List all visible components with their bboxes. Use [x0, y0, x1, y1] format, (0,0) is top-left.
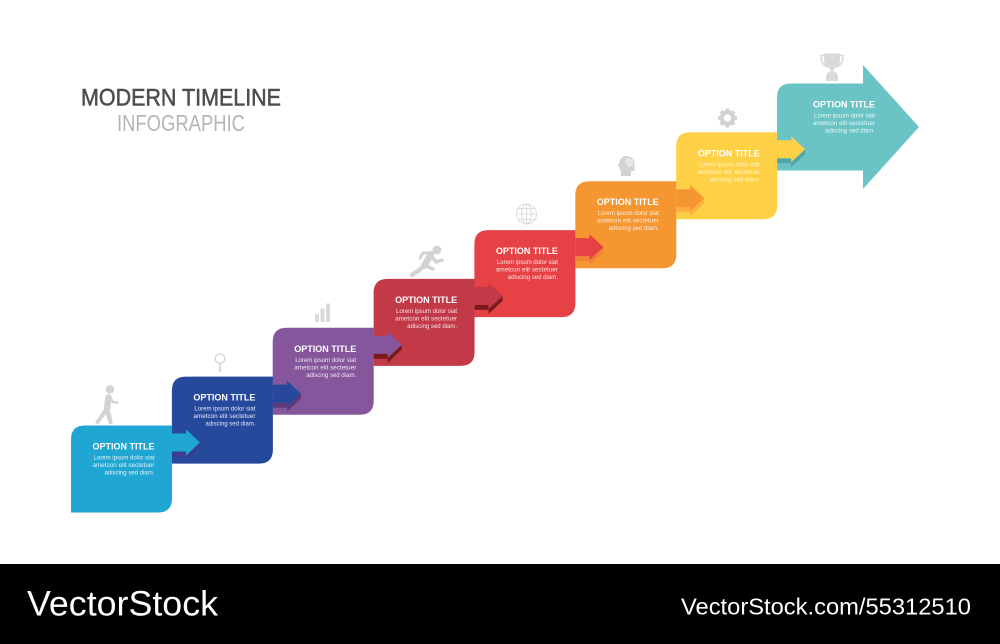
- step 3 panel: purple: ametcon elit sectetuer: [294, 364, 356, 371]
- step 4 panel: crimson: adiscing sed diam.: [407, 323, 457, 330]
- icon: running person: [412, 246, 442, 275]
- step 2 panel: navy: ametcon elit sectetuer: [193, 413, 255, 420]
- icon: walking person: [98, 385, 117, 422]
- icon: globe: [516, 204, 536, 224]
- step 5 panel: red: adiscing sed diam.: [508, 274, 558, 281]
- step 7 panel: yellow: [676, 132, 805, 219]
- footer bar: [0, 564, 1000, 644]
- step 3 panel: purple: adiscing sed diam.: [306, 372, 356, 379]
- step 2 panel: navy: OPTION TITLE: [193, 393, 255, 403]
- step 7 panel: yellow: Lorem ipsum dolor siat: [699, 161, 760, 168]
- step 1 panel: blue: [71, 426, 200, 512]
- step 6 panel: orange: [575, 181, 704, 268]
- footer brand text: VectorStock: [27, 585, 219, 624]
- step 1 panel: blue: Lorem ipsum dolor siat: [94, 454, 155, 462]
- icon: head with gears: [618, 156, 634, 176]
- step 1 panel: blue: OPTION TITLE: [92, 442, 154, 452]
- step 5 panel: red: OPTION TITLE: [496, 246, 558, 256]
- heading: modern timeline infographic: [81, 84, 281, 136]
- step 4 panel: crimson: Lorem ipsum dolor siat: [396, 308, 457, 315]
- step 4 panel: crimson: [374, 279, 503, 366]
- step 5 panel: red: [474, 230, 603, 317]
- step 2 panel: navy: Lorem ipsum dolor siat: [194, 406, 256, 413]
- step 3 panel: purple: [273, 328, 402, 415]
- step 6 panel: orange: adiscing sed diam.: [609, 225, 659, 232]
- step 8 panel: teal final arrow: adiscing sed diam.: [825, 128, 875, 134]
- icon: trophy: [821, 54, 843, 81]
- step 8 panel: teal final arrow: [777, 65, 919, 189]
- step 1 panel: blue: ametcon elit sectetuer: [92, 462, 154, 469]
- step 6 panel: orange: Lorem ipsum dolor siat: [598, 210, 659, 217]
- icon: magnifier: [215, 354, 225, 372]
- step 5 panel: red: ametcon elit sectetuer: [496, 267, 558, 274]
- step 8 panel: teal final arrow: ametcon elit sectetuer: [813, 120, 875, 127]
- step 3 panel: purple: Lorem ipsum dolor siat: [295, 357, 356, 364]
- icon: bar chart: [315, 304, 330, 322]
- step 2 panel: navy: [172, 377, 301, 464]
- icon: gear: [718, 108, 737, 128]
- step 4 panel: crimson: OPTION TITLE: [395, 295, 457, 305]
- step 5 panel: red: Lorem ipsum dolor siat: [497, 259, 558, 266]
- footer image id text: VectorStock.com/55312510: [681, 594, 971, 620]
- step 7 panel: yellow: OPTION TITLE: [698, 148, 760, 158]
- heading: modern timeline infographic: INFOGRAPHIC: [117, 110, 245, 136]
- step 6 panel: orange: ametcon elit sectetuer: [597, 218, 659, 225]
- step 4 panel: crimson: ametcon elit sectetuer: [395, 315, 457, 322]
- step 6 panel: orange: OPTION TITLE: [597, 197, 659, 207]
- step 2 panel: navy: adiscing sed diam.: [205, 421, 256, 428]
- step 3 panel: purple: OPTION TITLE: [294, 344, 356, 354]
- step 7 panel: yellow: ametcon elit sectetuer: [698, 169, 760, 176]
- heading: modern timeline infographic: MODERN TIMELINE: [81, 84, 281, 112]
- step 7 panel: yellow: adiscing sed diam.: [710, 176, 760, 183]
- step 8 panel: teal final arrow: Lorem ipsum dolor siat: [814, 112, 875, 120]
- step 1 panel: blue: adiscing sed diam.: [104, 470, 155, 476]
- step 8 panel: teal final arrow: OPTION TITLE: [813, 100, 875, 110]
